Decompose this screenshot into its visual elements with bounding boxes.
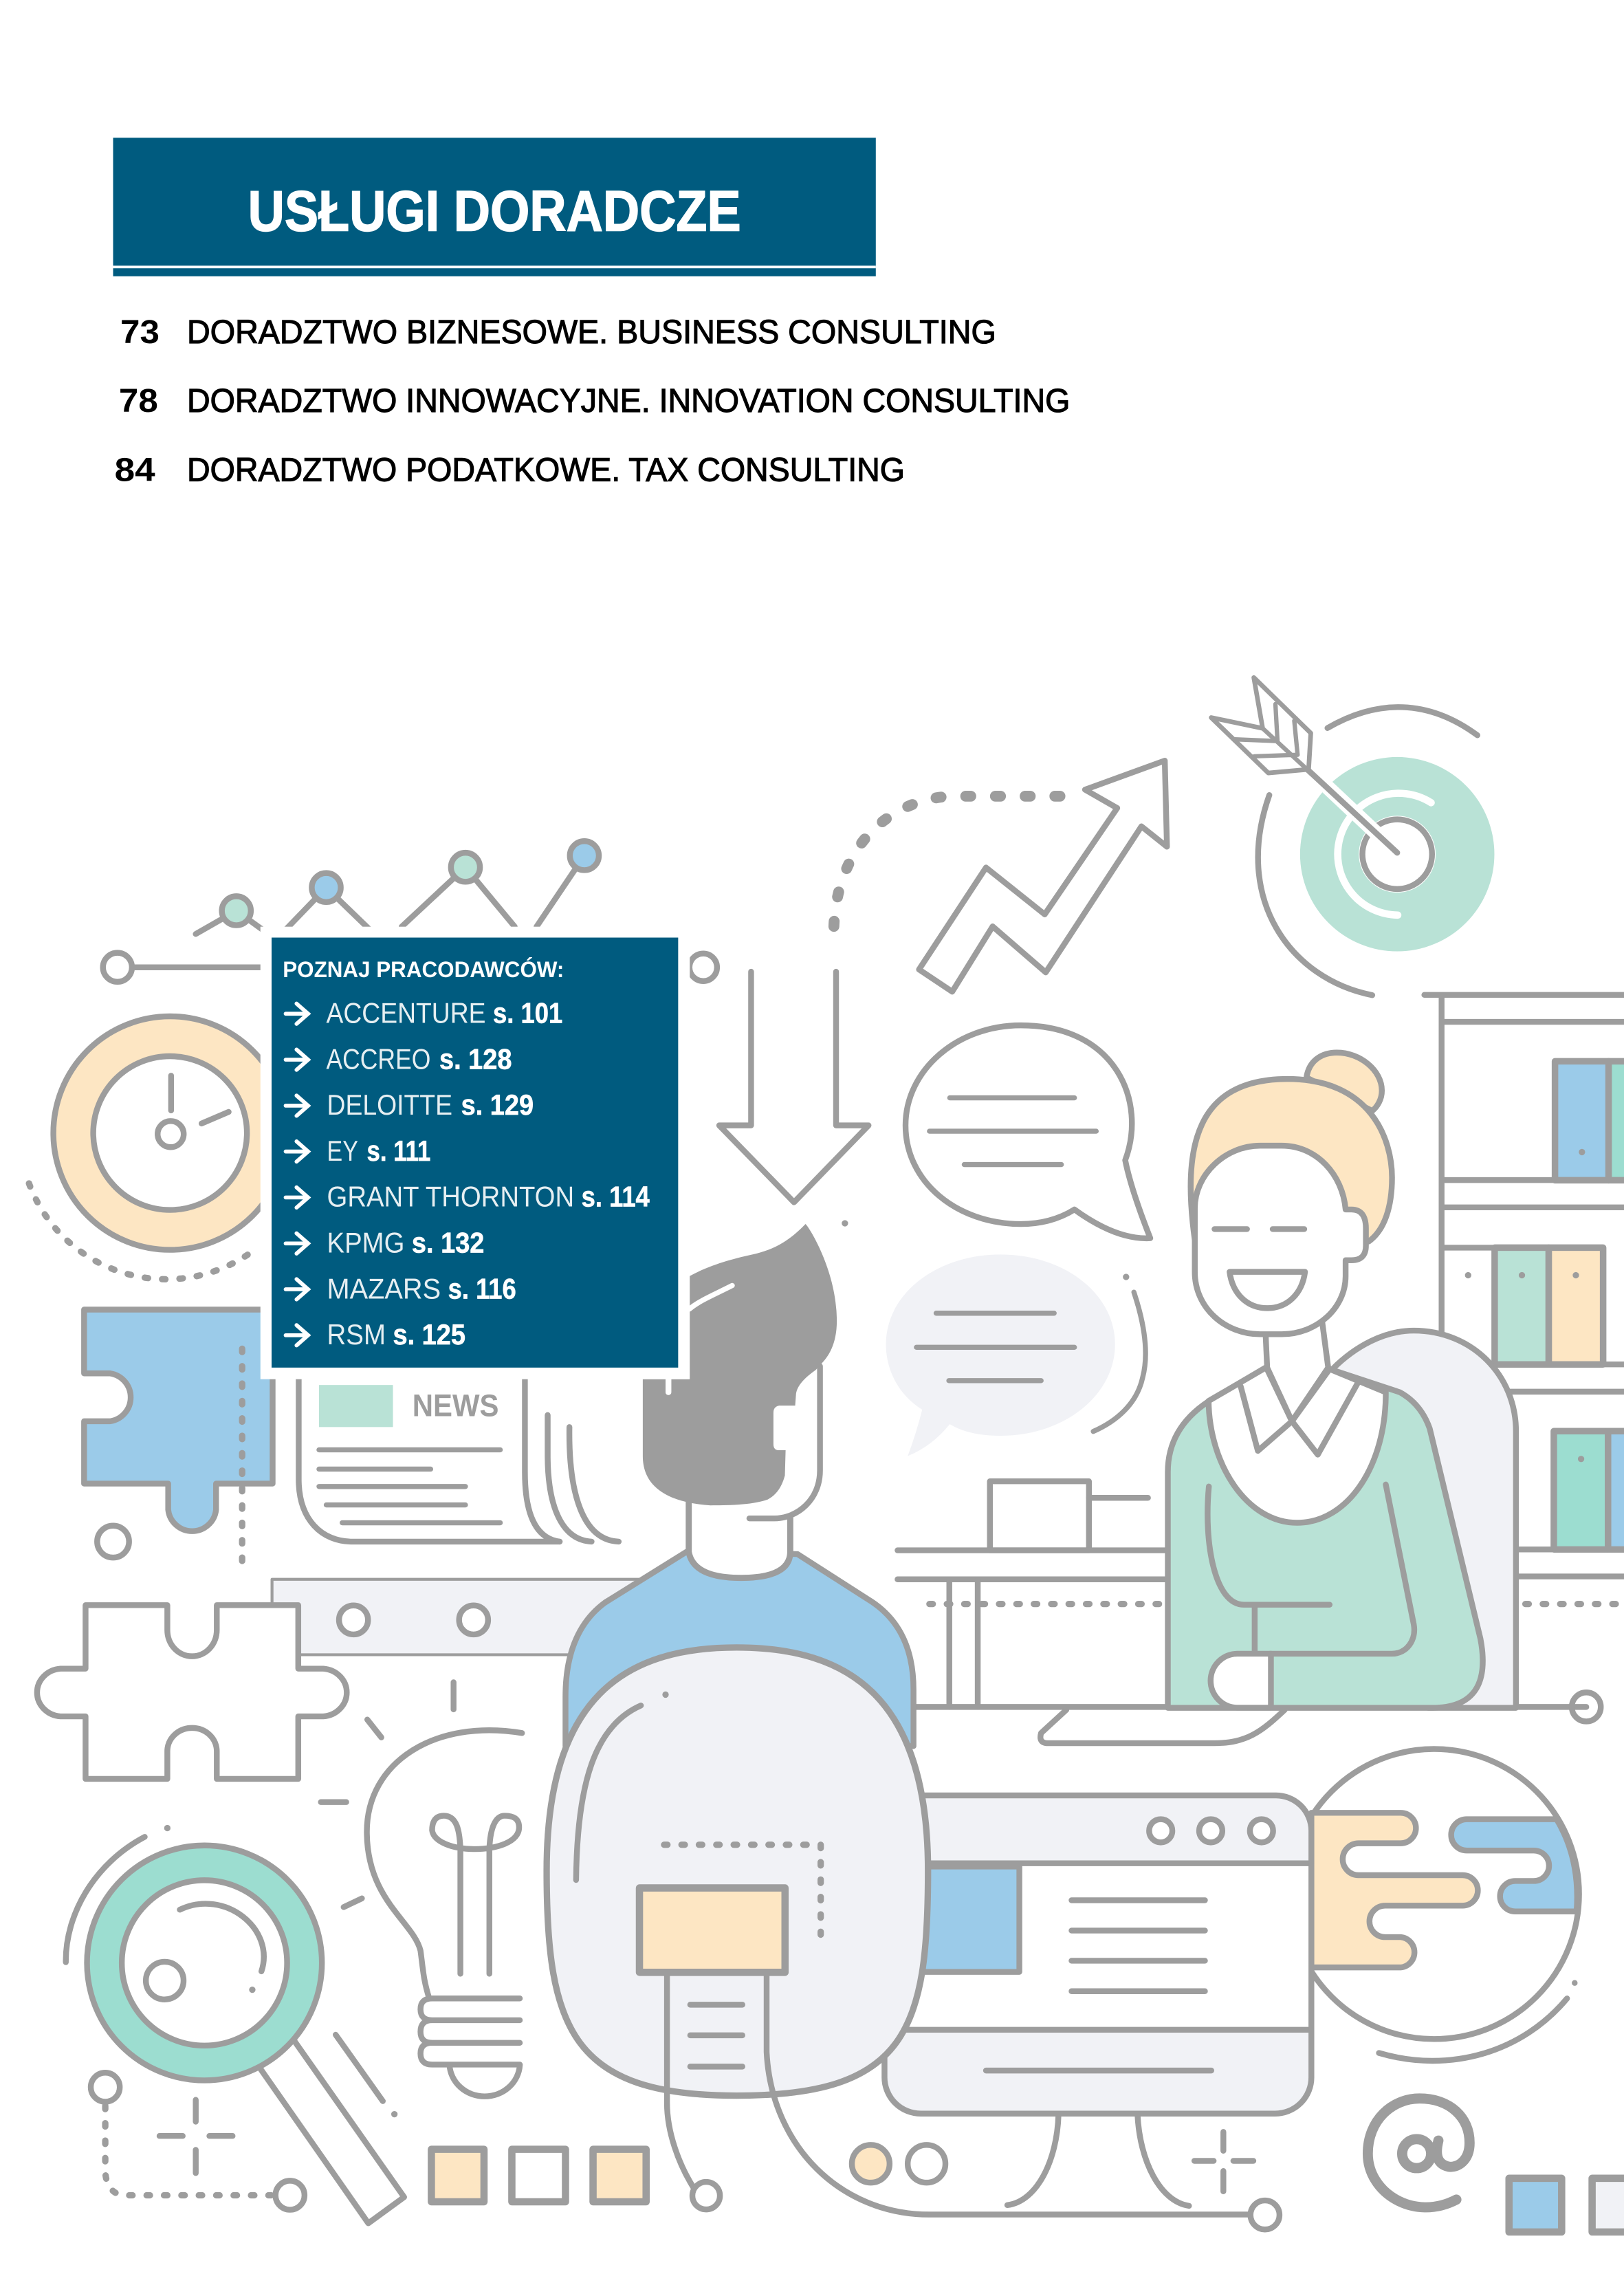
employers panel: [261, 927, 690, 1379]
employer list: s. 111: [367, 1135, 430, 1167]
employer list: GRANT THORNTON: [327, 1181, 574, 1213]
table of contents: DORADZTWO INNOWACYJNE. INNOVATION CONSULTING: [187, 382, 1070, 419]
employer list: [285, 997, 650, 1351]
neck: [1266, 1319, 1328, 1421]
title banner: [113, 138, 876, 276]
zigzag growth arrow: [919, 761, 1167, 992]
man from behind: [547, 1224, 1280, 2229]
employer list: ACCENTURE: [327, 997, 485, 1029]
dotted connector: [91, 2073, 305, 2210]
employer list: s. 101: [493, 997, 562, 1029]
employer list: RSM: [327, 1318, 386, 1351]
computer monitor: [884, 1795, 1311, 2206]
panel heading: POZNAJ PRACODAWCÓW:: [283, 956, 564, 982]
books: middle shelf: [1465, 1247, 1603, 1364]
table of contents: DORADZTWO PODATKOWE. TAX CONSULTING: [187, 451, 905, 488]
chart nodes line: [103, 841, 717, 982]
employer list: s. 129: [461, 1089, 534, 1121]
arms: [1207, 1485, 1414, 1654]
icon: at sign: [1368, 2099, 1469, 2207]
icon: white puzzle piece: [37, 1605, 347, 1779]
employer list: EY: [327, 1135, 358, 1167]
network circle with blobs: [1289, 1749, 1579, 2061]
table of contents: 73: [120, 314, 160, 351]
icon: newspaper: NEWS: [413, 1388, 498, 1423]
icon: blue puzzle piece: [84, 1309, 272, 1562]
office chair: [1332, 1331, 1516, 1708]
table of contents: 78: [119, 382, 158, 419]
table of contents: DORADZTWO BIZNESOWE. BUSINESS CONSULTING: [187, 314, 996, 351]
torso: [1168, 1368, 1483, 1708]
table of contents: [115, 314, 1070, 488]
speech bubble filled: [842, 1220, 1145, 1456]
employer list: s. 132: [412, 1227, 484, 1259]
employer list: MAZARS: [327, 1272, 441, 1304]
neck: [689, 1502, 790, 1578]
desk: [897, 1481, 1601, 1743]
collar: [1240, 1368, 1358, 1454]
employer list: s. 114: [582, 1181, 650, 1213]
books: top shelf: [1555, 1061, 1624, 1180]
table of contents: 84: [115, 451, 155, 488]
hair bun: [1306, 1053, 1382, 1111]
blue shirt: [565, 1552, 914, 1746]
face: [1195, 1146, 1366, 1334]
chair back: [547, 1648, 928, 2096]
employer list: DELOITTE: [327, 1089, 452, 1121]
icon: sparkle cross right: [1194, 2132, 1253, 2191]
employer list: s. 128: [439, 1042, 512, 1075]
title banner: USŁUGI DORADCZE: [248, 179, 741, 243]
big down arrow: [719, 972, 868, 1202]
wide strip: [272, 1579, 663, 1654]
dotted curved path: [834, 796, 1060, 931]
face outline: [749, 1366, 820, 1518]
icon: magnifying glass: [66, 1825, 404, 2223]
employer list: KPMG: [327, 1227, 404, 1259]
icon: target with arrow: [1211, 677, 1494, 995]
hair: [643, 1224, 837, 1505]
icon: newspaper: [298, 1370, 619, 1542]
neckline: [1209, 1368, 1386, 1523]
speech bubble outlined: [906, 1025, 1150, 1238]
squares row: [431, 2150, 646, 2202]
employer list: ACCREO: [327, 1042, 430, 1075]
woman at desk: [1168, 1053, 1516, 1708]
employer list: s. 125: [393, 1318, 465, 1351]
bookshelves: [1425, 995, 1624, 1604]
icon: sparkle cross: [160, 2100, 232, 2173]
icon: small circles: [852, 2145, 945, 2183]
icon: clock: [29, 1016, 287, 1279]
books: lower shelf: [1554, 1431, 1624, 1549]
squares right: [1509, 2178, 1624, 2232]
hair: [1191, 1079, 1392, 1247]
icon: light bulb: [321, 1683, 522, 2097]
employer list: s. 116: [448, 1272, 516, 1304]
tag: [639, 1888, 785, 1972]
